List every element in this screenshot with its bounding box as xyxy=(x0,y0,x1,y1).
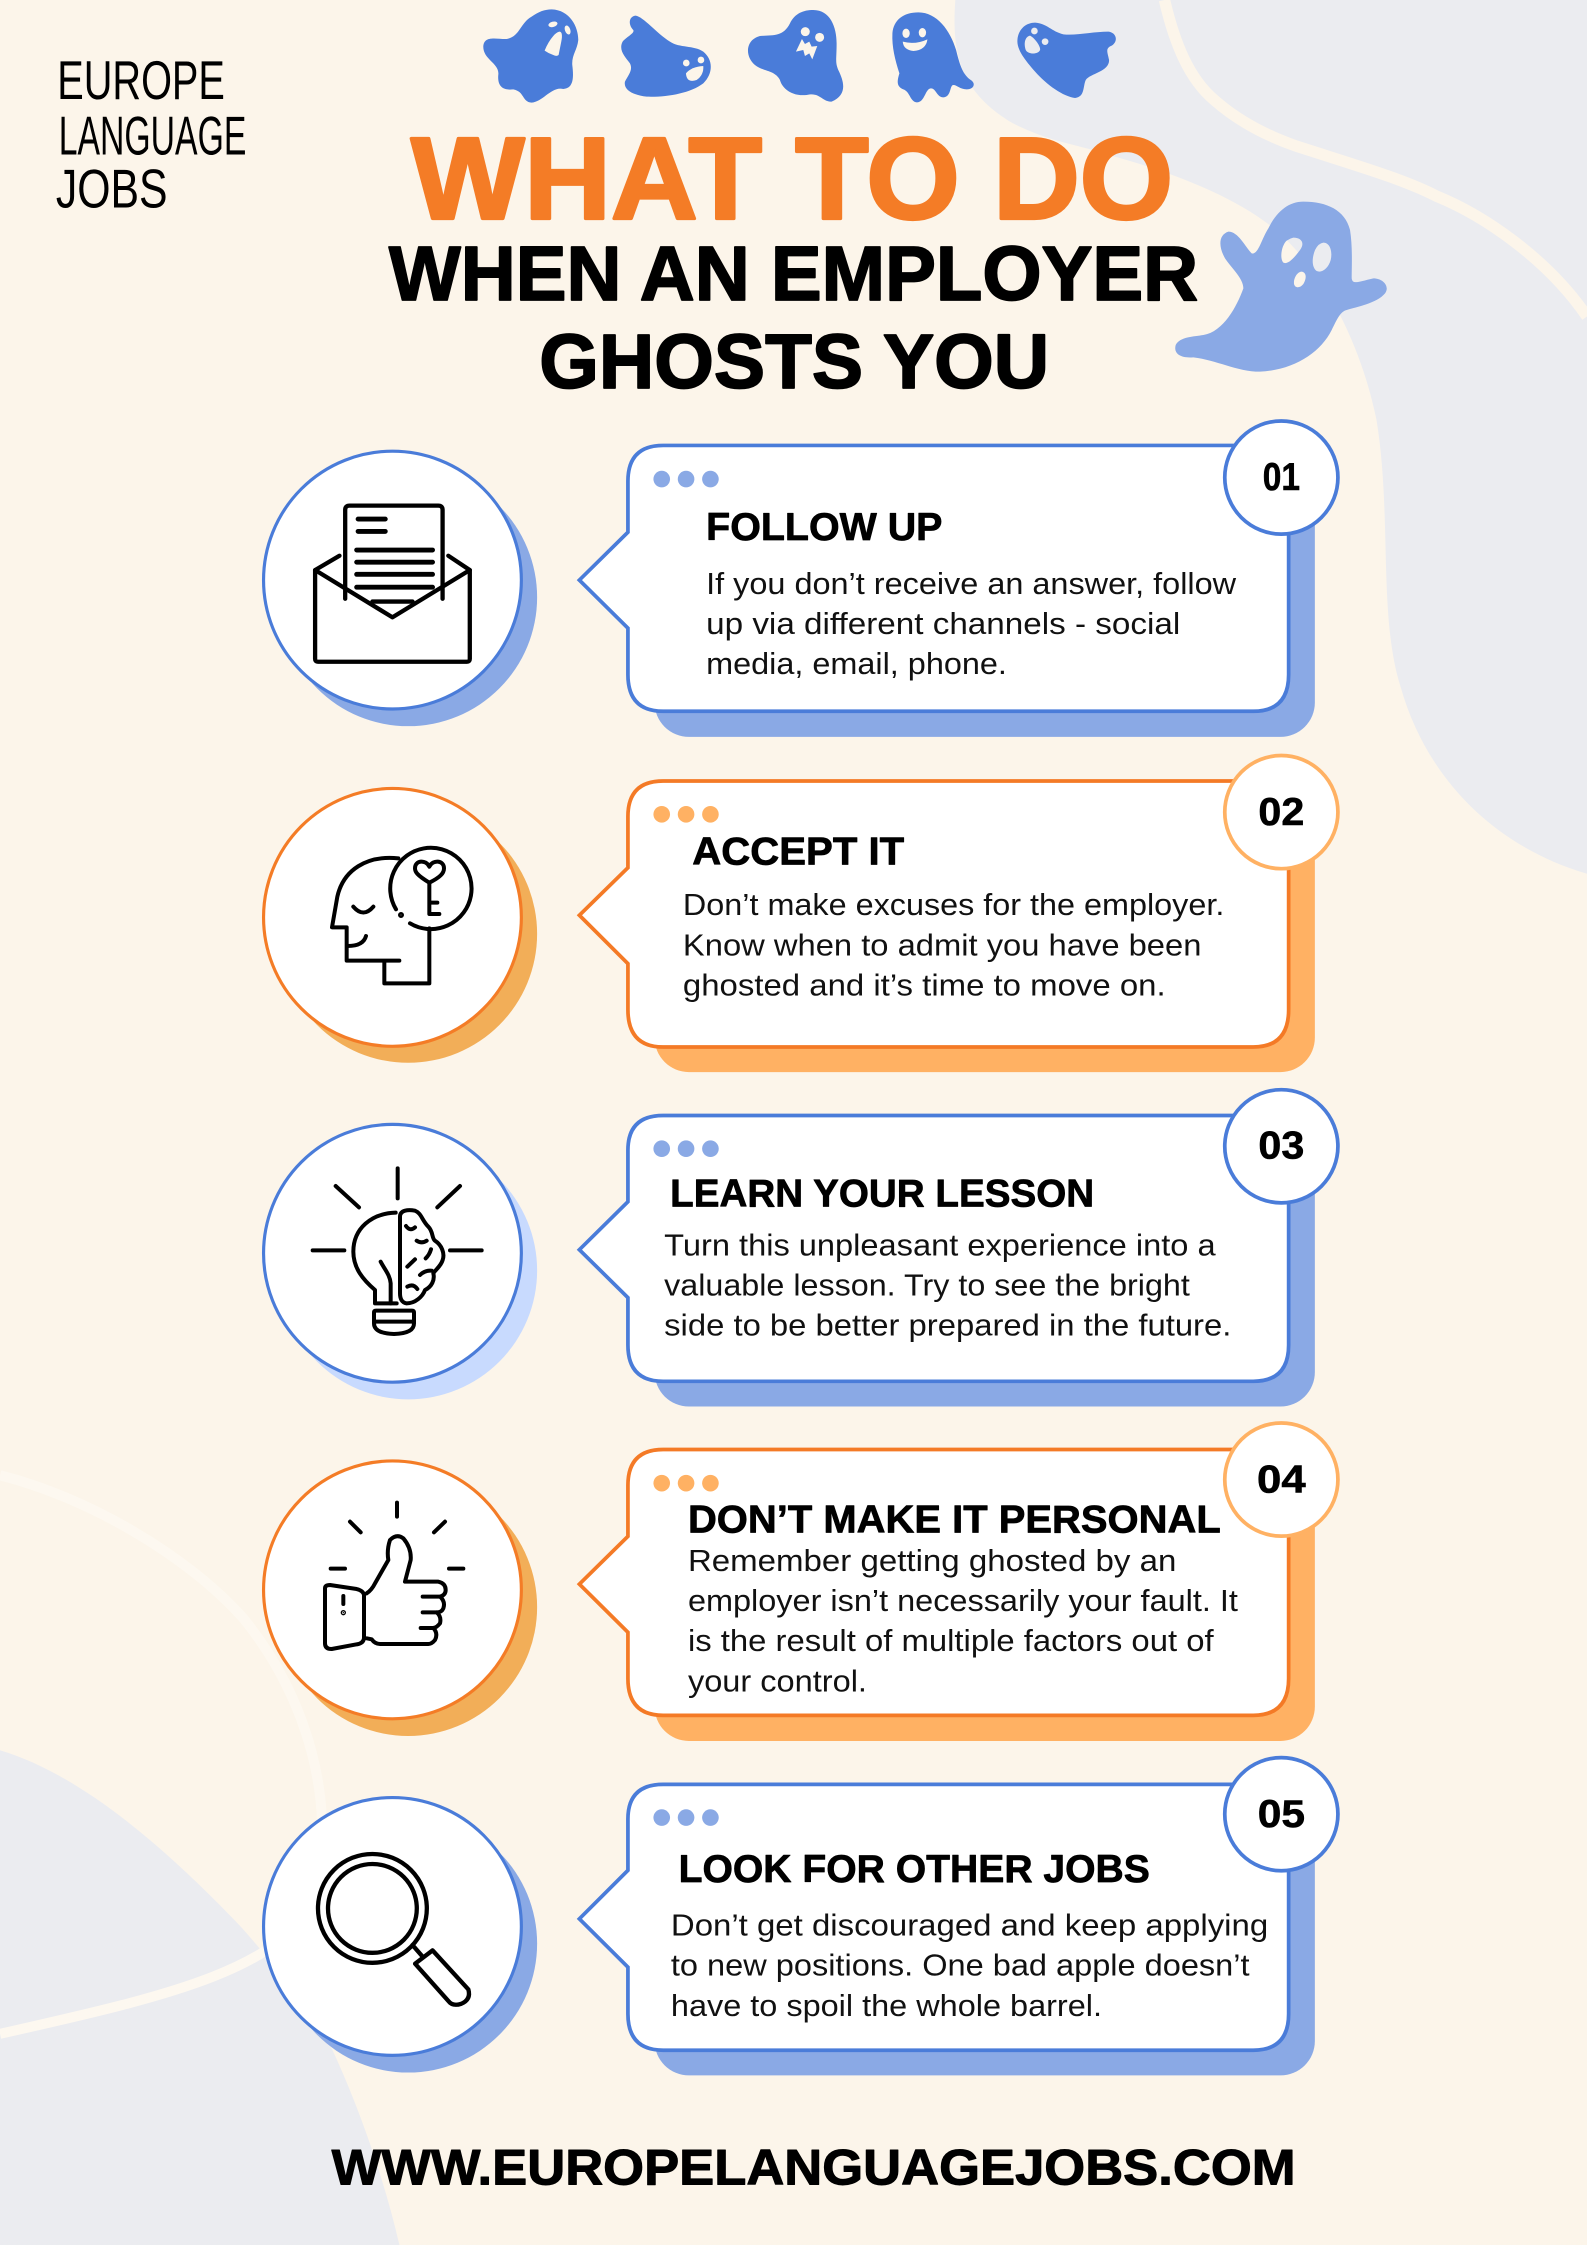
step 5 number: 05 xyxy=(1258,1793,1305,1836)
row of five small ghosts xyxy=(483,9,1116,103)
step 5 icon circle xyxy=(264,1798,537,2073)
step 1 heading: FOLLOW UP xyxy=(706,506,942,549)
logo: LANGUAGE xyxy=(59,106,246,167)
step 3 heading: LEARN YOUR LESSON xyxy=(670,1173,1094,1216)
icon: thumbs up xyxy=(325,1503,463,1649)
step 4 heading: DON’T MAKE IT PERSONAL xyxy=(688,1499,1221,1542)
title: what to do: WHAT TO DO xyxy=(411,113,1173,243)
step 4 number: 04 xyxy=(1257,1458,1306,1501)
step 5 body: Don’t get discouraged and keep applying xyxy=(671,1908,1268,1943)
step 2 number: 02 xyxy=(1258,791,1304,834)
step 2 number xyxy=(1225,756,1338,869)
step 4 number xyxy=(1225,1423,1338,1536)
bottom left grey blob xyxy=(0,1750,400,2245)
step 4 body xyxy=(688,1543,1238,1698)
step 4 icon circle xyxy=(264,1461,537,1736)
step 3 xyxy=(264,1090,1338,1407)
icon: lightbulb with brain xyxy=(313,1168,482,1334)
step 2 body: Don’t make excuses for the employer. xyxy=(683,887,1224,922)
step 2 body xyxy=(683,887,1224,1002)
step 4 card xyxy=(579,1449,1315,1741)
title: ghosts you: GHOSTS YOU xyxy=(539,319,1049,405)
step 1 body: If you don’t receive an answer, follow xyxy=(706,566,1237,601)
website url: WWW.EUROPELANGUAGEJOBS.COM xyxy=(332,2139,1296,2195)
step 3 body: valuable lesson. Try to see the bright xyxy=(664,1267,1190,1302)
step 2 heading: ACCEPT IT xyxy=(692,830,905,873)
step 5 body: have to spoil the whole barrel. xyxy=(671,1988,1102,2023)
step 1 xyxy=(264,421,1338,737)
step 3 body: Turn this unpleasant experience into a xyxy=(664,1227,1217,1262)
logo xyxy=(56,50,246,220)
step 1 number: 01 xyxy=(1263,456,1300,499)
top right cream curve xyxy=(1164,0,1587,317)
logo: EUROPE xyxy=(57,50,225,111)
step 1 number xyxy=(1225,421,1338,534)
step 5 heading: LOOK FOR OTHER JOBS xyxy=(679,1848,1150,1891)
bottom left cream curve xyxy=(0,1475,322,2034)
icon: head with heart key xyxy=(332,848,472,983)
step 2 card xyxy=(579,781,1315,1072)
ghost 1 xyxy=(483,9,578,103)
ghost 3 xyxy=(748,10,843,102)
step 3 icon circle xyxy=(264,1124,537,1399)
logo: JOBS xyxy=(56,159,168,220)
step 4 xyxy=(264,1423,1338,1741)
step 4 body: is the result of multiple factors out of xyxy=(688,1623,1214,1658)
step 5 xyxy=(264,1758,1338,2075)
ghost 5 xyxy=(1017,23,1116,98)
step 4 body: Remember getting ghosted by an xyxy=(688,1543,1176,1578)
ghost 2 xyxy=(621,16,711,97)
step 2 icon circle xyxy=(264,788,537,1063)
step 5 card xyxy=(579,1784,1315,2075)
step 3 card xyxy=(579,1115,1315,1407)
step 5 body: to new positions. One bad apple doesn’t xyxy=(671,1948,1250,1983)
ghost 4 xyxy=(892,12,974,102)
step 1 body: media, email, phone. xyxy=(706,646,1007,681)
step 1 body xyxy=(706,566,1237,681)
step 1 body: up via different channels - social xyxy=(706,606,1180,641)
icon: magnifying glass xyxy=(318,1854,469,2005)
step 3 body: side to be better prepared in the future. xyxy=(664,1307,1231,1342)
step 4 body: your control. xyxy=(688,1663,867,1698)
step 5 number xyxy=(1225,1758,1338,1871)
step 3 number xyxy=(1225,1090,1338,1203)
step 5 body xyxy=(671,1908,1268,2023)
step 1 icon circle xyxy=(264,451,537,726)
step 2 body: ghosted and it’s time to move on. xyxy=(683,967,1166,1002)
step 4 body: employer isn’t necessarily your fault. It xyxy=(688,1583,1238,1618)
title: when an employer: WHEN AN EMPLOYER xyxy=(389,231,1198,317)
step 2 body: Know when to admit you have been xyxy=(683,927,1201,962)
large light blue ghost xyxy=(1175,202,1387,372)
step 2 xyxy=(264,756,1338,1072)
top right grey blob xyxy=(955,0,1587,874)
icon: open envelope with letter xyxy=(315,506,470,662)
step 1 card xyxy=(579,445,1315,737)
step 3 number: 03 xyxy=(1258,1125,1304,1168)
step 3 body xyxy=(664,1227,1231,1342)
